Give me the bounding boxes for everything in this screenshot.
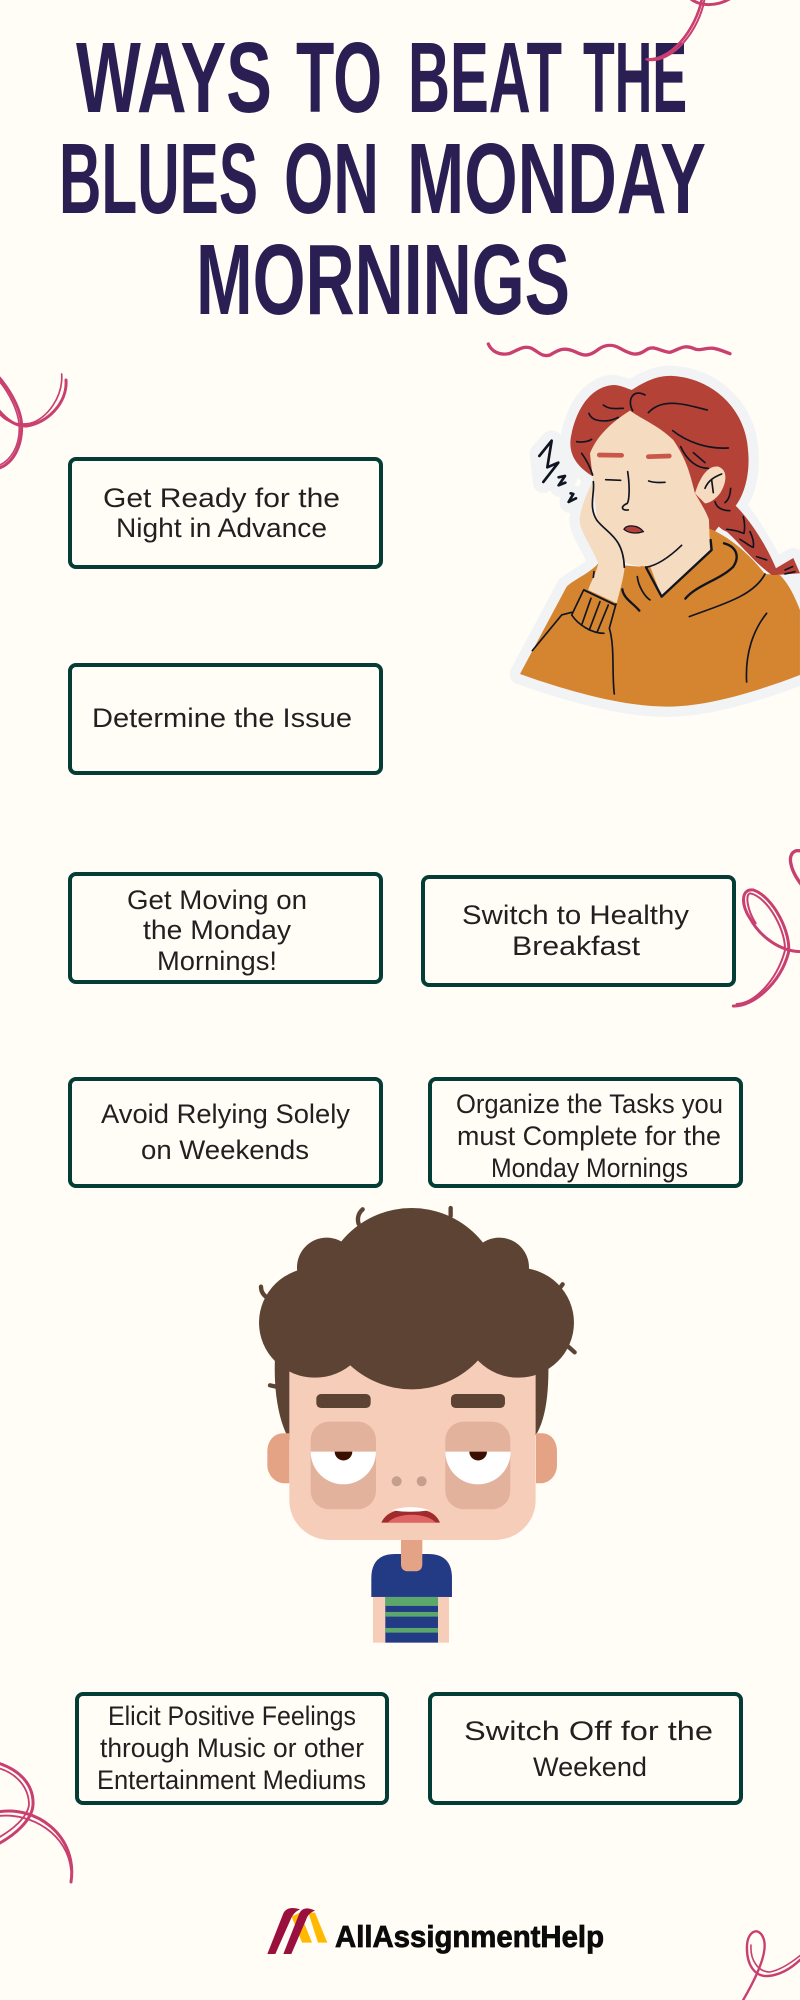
box: determine the issue <box>70 665 381 773</box>
box: healthy breakfast: Breakfast <box>512 931 641 961</box>
girl face <box>590 411 710 597</box>
box: positive feelings <box>77 1694 387 1803</box>
boy eyes <box>311 1452 511 1484</box>
box: positive feelings: through Music or other <box>100 1733 364 1763</box>
illustration: tired boy <box>259 1208 575 1643</box>
title: THE <box>583 22 687 134</box>
box: avoid relying on weekends <box>70 1079 381 1186</box>
girl mouth <box>624 526 643 533</box>
box: get ready: Night in Advance <box>116 513 327 543</box>
box: organize tasks: must Complete for the <box>457 1121 721 1151</box>
title: TO <box>296 22 382 134</box>
title: ON <box>284 123 379 235</box>
squiggle: right loop beside breakfast box <box>733 851 800 1006</box>
boy eye bags <box>311 1422 510 1509</box>
box: switch off: Switch Off for the <box>464 1716 713 1746</box>
boy mouth <box>381 1507 440 1523</box>
logo: AllAssignmentHelp <box>267 1908 604 1954</box>
boy back hair <box>275 1357 548 1440</box>
squiggle: bottom right loop <box>742 1931 800 2000</box>
box: determine the issue: Determine the Issue <box>92 703 352 733</box>
girl line work <box>532 393 795 694</box>
box: get moving: Mornings! <box>157 946 277 976</box>
girl braid <box>710 505 800 575</box>
title: MORNINGS <box>196 224 570 336</box>
boy neck <box>401 1540 422 1571</box>
box: get moving: Get Moving on <box>127 885 307 915</box>
box: healthy breakfast <box>423 877 734 985</box>
girl hair <box>570 376 749 533</box>
title: BEAT <box>408 22 562 134</box>
box: healthy breakfast: Switch to Healthy <box>462 900 690 930</box>
box: organize tasks <box>430 1079 741 1186</box>
boy torso <box>373 1597 449 1643</box>
boy eyebrows <box>316 1394 505 1408</box>
box: positive feelings: Elicit Positive Feelings <box>108 1701 356 1731</box>
box: get moving: the Monday <box>143 915 292 945</box>
box: get moving <box>70 874 381 982</box>
squiggle: wave above girl <box>488 344 730 356</box>
squiggle: left loop near top box <box>0 374 66 468</box>
box: get ready: Get Ready for the <box>103 483 340 513</box>
title <box>59 22 706 336</box>
girl eyebrows <box>599 455 669 457</box>
boy stray hairs <box>261 1208 575 1387</box>
box: organize tasks: Organize the Tasks you <box>456 1089 723 1119</box>
boy ears <box>267 1433 557 1483</box>
girl cuff <box>572 589 616 634</box>
box: switch off: Weekend <box>533 1752 647 1782</box>
logo wordmark: AllAssignmentHelp <box>335 1919 604 1954</box>
box: avoid relying on weekends: Avoid Relying Solely <box>101 1099 351 1129</box>
girl sticker halo <box>520 376 800 707</box>
girl zzz <box>539 441 576 502</box>
girl hand <box>580 480 625 603</box>
box: positive feelings: Entertainment Mediums <box>97 1765 366 1795</box>
title: BLUES <box>59 123 258 235</box>
squiggle: bottom left loop <box>0 1763 72 1882</box>
girl hoodie <box>520 528 800 707</box>
squiggle: top right loop <box>647 0 731 60</box>
box: get ready <box>70 459 381 567</box>
title: WAYS <box>76 22 272 134</box>
illustration: sleepy girl <box>520 376 800 707</box>
boy curly hair <box>259 1208 574 1389</box>
box: avoid relying on weekends: on Weekends <box>141 1135 309 1165</box>
boy nose <box>392 1476 427 1486</box>
box: organize tasks: Monday Mornings <box>491 1153 688 1183</box>
box: switch off <box>430 1694 741 1803</box>
girl ear <box>695 466 725 503</box>
boy shirt <box>371 1554 452 1597</box>
boy face <box>289 1357 536 1540</box>
logo mark <box>267 1908 327 1954</box>
